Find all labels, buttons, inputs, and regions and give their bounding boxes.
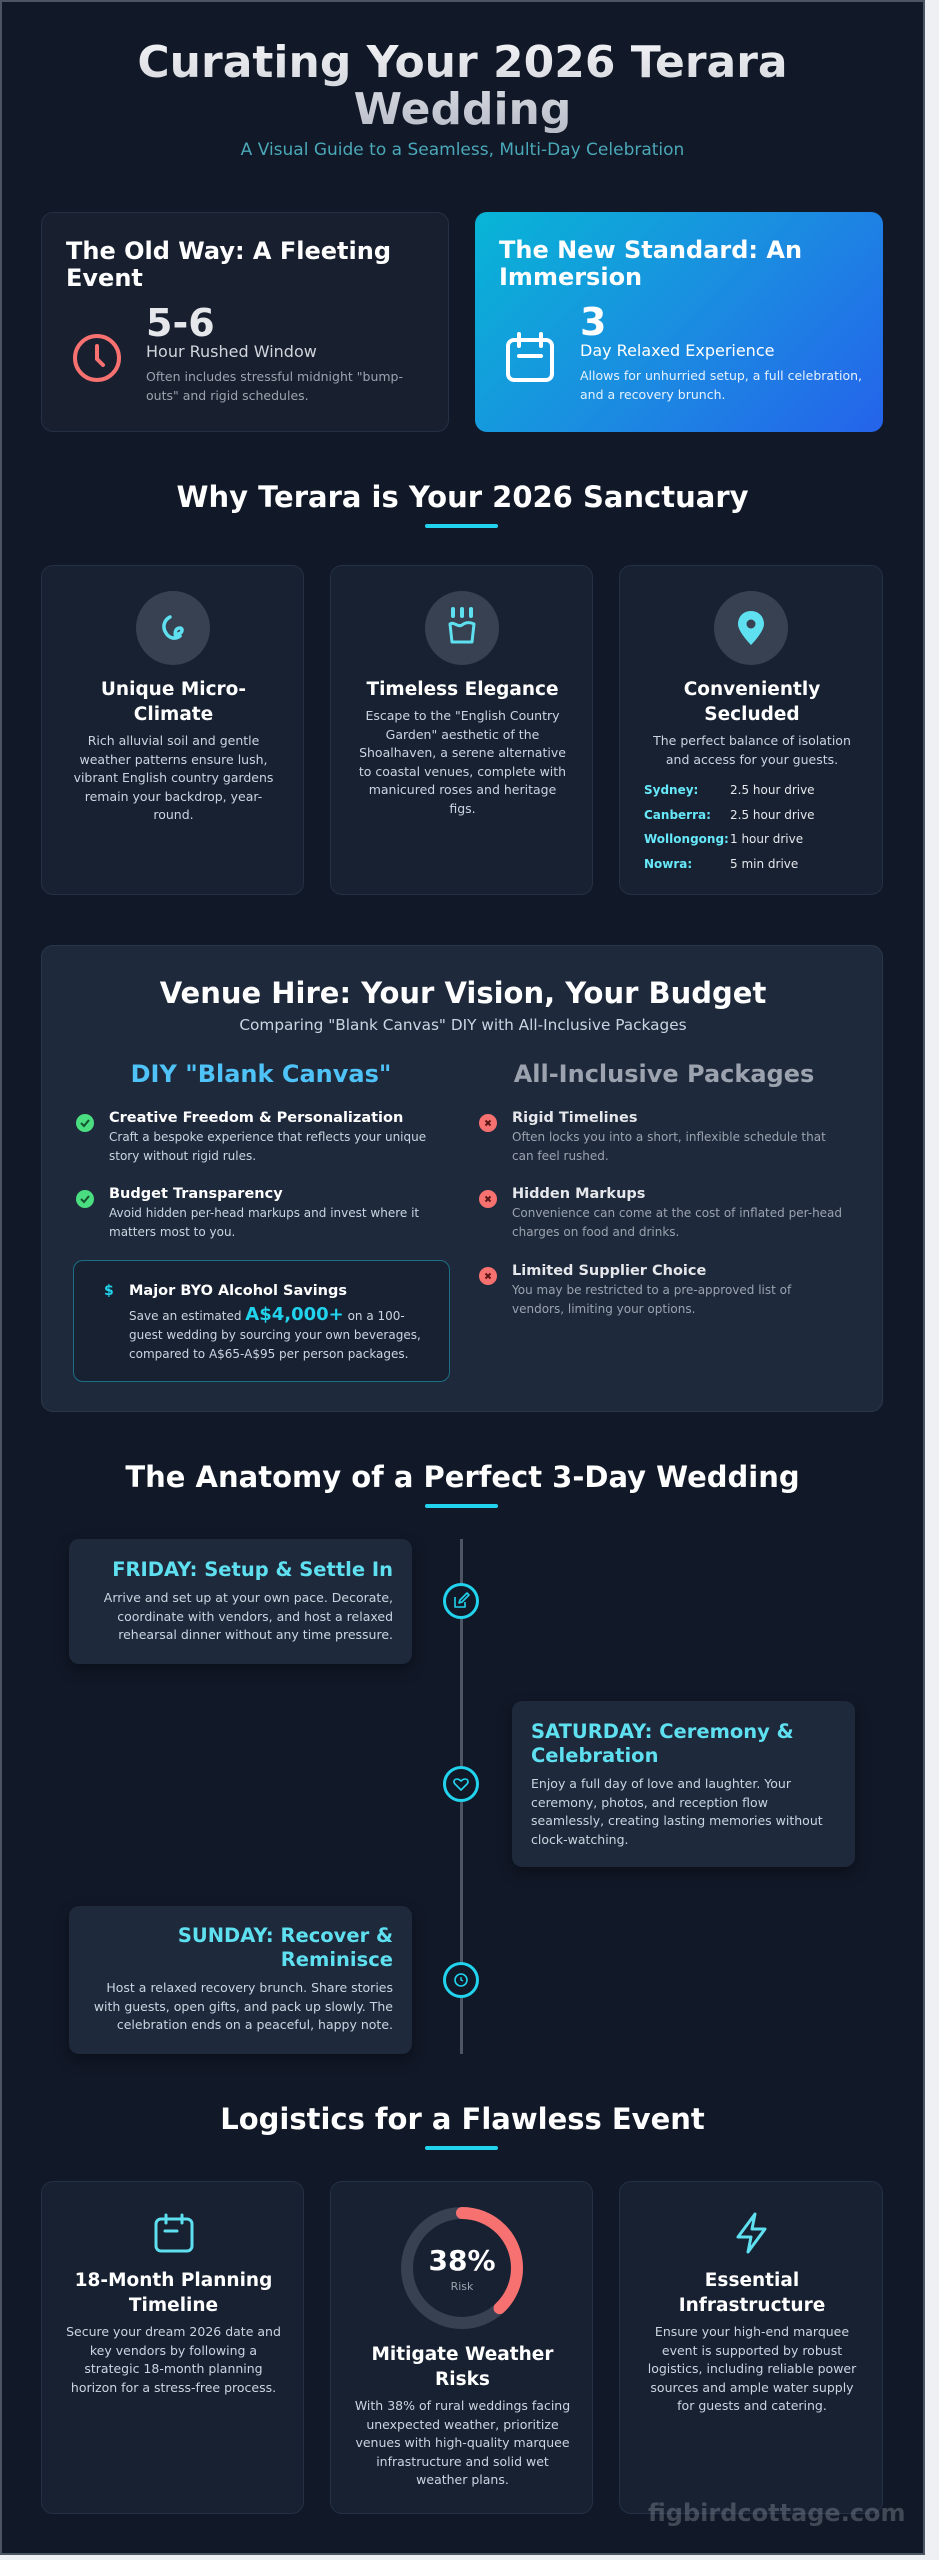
icon: saturday heart	[443, 1766, 479, 1802]
chart: 38% donut: Risk	[451, 2280, 474, 2293]
description: event is supported by robust	[662, 2342, 842, 2358]
description: With 38% of rural weddings facing	[355, 2398, 570, 2413]
description	[66, 2324, 281, 2394]
icon: lightning bolt	[736, 2212, 767, 2254]
description: Rich alluvial soil and gentle	[88, 733, 259, 748]
callout: BYO savings: guest wedding by sourcing your own beverages,	[129, 1328, 421, 1342]
title	[372, 2344, 554, 2390]
stat: 5-6 hours: Hour Rushed Window	[146, 342, 317, 361]
title: Infrastructure	[679, 2295, 825, 2316]
stat: 3 days	[580, 300, 862, 402]
panel: secluded	[619, 565, 883, 895]
title: Conveniently	[684, 679, 820, 700]
callout: BYO savings	[73, 1260, 450, 1382]
timeline card: friday: rehearsal dinner without any time pressure.	[118, 1627, 393, 1642]
old way heading: The Old Way: A Fleeting	[66, 237, 391, 265]
drive times table: Nowra:	[644, 856, 692, 870]
timeline card: sunday: SUNDAY: Recover &	[178, 1924, 393, 1947]
timeline card: sunday	[69, 1906, 412, 2054]
icon: friday edit	[443, 1583, 479, 1619]
title: Risks	[435, 2369, 490, 2390]
panel: micro-climate	[41, 565, 304, 895]
description: Shoalhaven, a serene alternative	[359, 745, 566, 760]
description: venues with high-quality marquee	[355, 2435, 570, 2450]
pro: budget transparency: matters most to you.	[109, 1225, 235, 1239]
pro: creative freedom: Creative Freedom & Personalization	[109, 1110, 403, 1126]
drive times table: Canberra:	[644, 808, 711, 822]
heading: why terara: Why Terara is Your 2026 Sanctuary	[176, 480, 749, 514]
title: Essential	[705, 2270, 799, 2291]
panel: elegance	[330, 565, 593, 895]
con: hidden markups: Hidden Markups	[512, 1186, 645, 1202]
icon: leaf	[136, 591, 210, 665]
description: and access for your guests.	[666, 752, 838, 766]
title	[684, 679, 820, 725]
con: limited supplier choice: vendors, limiting your options.	[512, 1302, 695, 1316]
stat: 5-6 hours: outs" and rigid schedules.	[146, 388, 309, 402]
column heading: DIY: DIY "Blank Canvas"	[131, 1060, 391, 1088]
description: key vendors by following a	[90, 2342, 257, 2358]
description: Ensure your high-end marquee	[655, 2324, 849, 2339]
description: infrastructure and solid wet	[376, 2454, 549, 2468]
drive times table: 5 min drive	[730, 856, 798, 870]
stat: 3 days: 3	[580, 300, 606, 344]
timeline card: saturday: ceremony, photos, and reception flow	[531, 1794, 768, 1810]
timeline card: sunday: Host a relaxed recovery brunch. Share stories	[106, 1980, 393, 1995]
stat: 3 days: Allows for unhurried setup, a full celebration,	[580, 368, 862, 383]
timeline card: saturday: Celebration	[531, 1744, 658, 1767]
title: Mitigate Weather	[372, 2344, 553, 2365]
drive times table: 1 hour drive	[730, 832, 803, 846]
title: Unique Micro-	[101, 679, 246, 700]
title	[0, 39, 925, 133]
drive times table	[644, 783, 815, 870]
panel: new standard	[475, 212, 883, 432]
panel: old way	[41, 212, 449, 432]
description: round.	[153, 807, 194, 822]
watermark: figbirdcottage.com	[648, 2499, 906, 2527]
timeline card: friday: coordinate with vendors, and host a relaxed	[117, 1608, 393, 1624]
callout: BYO savings: Save an estimated A$4,000+ on a 100-	[129, 1304, 405, 1325]
pro: creative freedom: Craft a bespoke experience that reflects your unique	[109, 1130, 426, 1144]
description: sources and ample water supply	[650, 2380, 854, 2394]
callout: BYO savings: compared to A$65-A$95 per person packages.	[129, 1347, 408, 1361]
con: hidden markups: Convenience can come at the cost of inflated per-head	[512, 1206, 842, 1220]
title: Timeline	[129, 2295, 218, 2316]
pro: creative freedom	[76, 1110, 426, 1163]
description: unexpected weather, prioritize	[366, 2416, 559, 2432]
description: horizon for a stress-free process.	[71, 2380, 276, 2394]
drive times table: 2.5 hour drive	[730, 783, 815, 797]
title: Secluded	[704, 704, 800, 725]
pro: budget transparency: Budget Transparency	[109, 1186, 283, 1202]
description: Secure your dream 2026 date and	[66, 2324, 281, 2339]
icon: sunday clock	[443, 1962, 479, 1998]
panel: planning timeline	[41, 2181, 304, 2514]
timeline card: friday: FRIDAY: Setup & Settle In	[112, 1558, 393, 1581]
description	[359, 708, 566, 816]
new standard heading	[499, 236, 802, 291]
icon: garden	[425, 591, 499, 665]
drive times table: Sydney:	[644, 783, 698, 797]
venue subtitle: Comparing "Blank Canvas" DIY with All-Inclusive Packages	[239, 1016, 687, 1034]
old way heading	[66, 237, 391, 292]
column heading: all-inclusive: All-Inclusive Packages	[514, 1060, 814, 1088]
description: Escape to the "English Country	[365, 708, 560, 723]
timeline card: saturday: Enjoy a full day of love and laughter. Your	[531, 1776, 791, 1791]
old way heading: Event	[66, 264, 143, 292]
description: weather plans.	[416, 2472, 509, 2487]
chart: 38% donut: 38%	[428, 2244, 496, 2277]
drive times table: Wollongong:	[644, 832, 729, 846]
icon: clock	[73, 334, 121, 382]
description: for guests and catering.	[677, 2398, 827, 2413]
title: Timeless Elegance	[366, 679, 559, 700]
drive times table: 2.5 hour drive	[730, 808, 815, 822]
timeline card: sunday: celebration ends on a peaceful, happy note.	[117, 2017, 393, 2032]
subtitle: A Visual Guide to a Seamless, Multi-Day Celebration	[241, 140, 684, 160]
callout: BYO savings: Major BYO Alcohol Savings	[129, 1283, 347, 1299]
title: Curating Your 2026 Terara	[137, 37, 788, 88]
stat: 5-6 hours: 5-6	[146, 301, 215, 345]
con: limited supplier choice: You may be restricted to a pre-approved list of	[512, 1283, 791, 1297]
timeline card: saturday: seamlessly, creating lasting memories without	[531, 1813, 823, 1828]
stat: 3 days: and a recovery brunch.	[580, 386, 725, 402]
con: rigid timelines	[479, 1110, 826, 1163]
icon: calendar	[506, 332, 554, 382]
new standard heading: The New Standard: An	[499, 236, 802, 264]
timeline card: saturday: SATURDAY: Ceremony &	[531, 1720, 794, 1743]
pro: budget transparency	[76, 1186, 419, 1239]
stat: 5-6 hours	[146, 301, 403, 402]
pro: budget transparency: Avoid hidden per-head markups and invest where it	[109, 1206, 419, 1220]
panel: weather risk	[330, 2181, 593, 2514]
timeline card: friday	[69, 1539, 412, 1664]
timeline card: sunday: Reminisce	[281, 1948, 393, 1971]
panel: venue hire	[41, 945, 883, 1412]
con: limited supplier choice	[479, 1263, 792, 1316]
timeline line	[460, 1539, 463, 2054]
stat: 3 days: Day Relaxed Experience	[580, 341, 774, 360]
description: figs.	[449, 800, 476, 816]
timeline card: saturday	[512, 1701, 855, 1867]
description: remain your backdrop, year-	[85, 788, 262, 804]
description: logistics, including reliable power	[648, 2361, 856, 2376]
title: 18-Month Planning	[75, 2270, 272, 2291]
panel: infrastructure	[619, 2181, 883, 2514]
description	[355, 2398, 570, 2487]
con: rigid timelines: can feel rushed.	[512, 1149, 609, 1163]
title: Wedding	[354, 84, 571, 135]
con: hidden markups	[479, 1186, 842, 1239]
description: The perfect balance of isolation	[653, 733, 851, 748]
heading: anatomy: The Anatomy of a Perfect 3-Day Wedding	[125, 1460, 800, 1494]
callout: BYO savings: $	[104, 1283, 114, 1299]
timeline card: friday: Arrive and set up at your own pace. Decorate,	[104, 1590, 393, 1605]
title	[75, 2270, 272, 2316]
description: vibrant English country gardens	[74, 770, 273, 785]
con: limited supplier choice: Limited Supplier Choice	[512, 1263, 706, 1279]
chart: 38% donut	[401, 2207, 523, 2329]
new standard heading: Immersion	[499, 263, 642, 291]
timeline card: sunday: with guests, open gifts, and pack up slowly. The	[94, 1998, 393, 2014]
description	[653, 733, 851, 766]
venue heading: Venue Hire: Your Vision, Your Budget	[160, 976, 766, 1010]
description: Garden" aesthetic of the	[386, 726, 539, 742]
title	[679, 2270, 825, 2316]
description: weather patterns ensure lush,	[80, 752, 268, 766]
con: hidden markups: charges on food and drinks.	[512, 1225, 679, 1239]
icon: calendar	[154, 2214, 194, 2252]
con: rigid timelines: Rigid Timelines	[512, 1110, 637, 1126]
con: rigid timelines: Often locks you into a short, inflexible schedule that	[512, 1130, 826, 1144]
stat: 5-6 hours: Often includes stressful midnight "bump-	[146, 369, 403, 384]
description: to coastal venues, complete with	[359, 764, 566, 778]
pro: creative freedom: story without rigid rules.	[109, 1149, 256, 1163]
description	[648, 2324, 856, 2413]
title	[101, 679, 246, 725]
description: manicured roses and heritage	[369, 782, 556, 797]
icon: map pin	[714, 591, 788, 665]
timeline card: saturday: clock-watching.	[531, 1832, 628, 1846]
description: strategic 18-month planning	[84, 2361, 263, 2376]
description	[74, 733, 273, 822]
heading: logistics: Logistics for a Flawless Event	[220, 2102, 705, 2136]
title: Climate	[134, 704, 213, 725]
